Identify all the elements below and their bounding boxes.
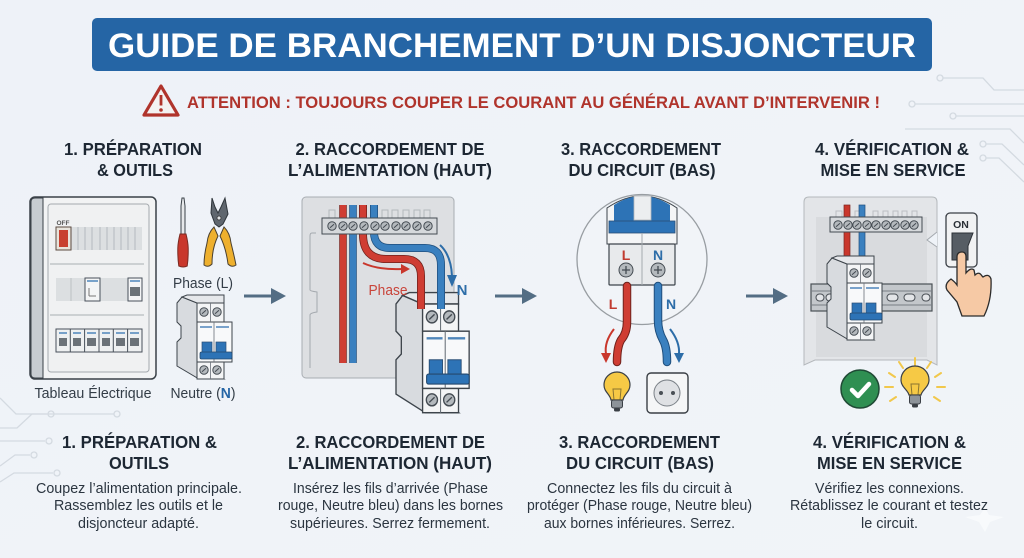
title banner: GUIDE DE BRANCHEMENT D’UN DISJONCTEUR [108, 27, 916, 65]
panel: electrical board: OFF [56, 220, 70, 227]
icon: ON switch [946, 213, 977, 267]
step 4 top heading [815, 138, 969, 180]
wires: feed [343, 205, 353, 363]
wires [617, 286, 667, 362]
description: Rétablissez le courant et testez [790, 498, 988, 514]
step 3 top heading: 3. RACCORDEMENT [561, 139, 721, 159]
breaker close-up: L [622, 247, 631, 263]
heading: DU CIRCUIT (BAS) [566, 453, 714, 473]
terminal block [830, 217, 922, 232]
wires [844, 205, 865, 263]
heading: L’ALIMENTATION (HAUT) [288, 453, 492, 473]
arrow 3 [746, 288, 788, 304]
icon: warning triangle [144, 86, 178, 115]
description: le circuit. [861, 516, 918, 532]
labels L N: L [609, 296, 618, 312]
step 1 top heading: 1. PRÉPARATION [64, 138, 202, 159]
description: aux bornes inférieures. Serrez. [544, 516, 735, 532]
icon: screwdriver [178, 198, 188, 267]
description: protéger (Phase rouge, Neutre bleu) [527, 498, 752, 514]
step 1 top heading: & OUTILS [97, 160, 173, 180]
label: Tableau Électrique: Tableau Électrique [34, 385, 152, 402]
heading: OUTILS [109, 453, 169, 473]
heading: MISE EN SERVICE [817, 453, 962, 473]
heading: 3. RACCORDEMENT [559, 432, 720, 452]
step 4 top heading: MISE EN SERVICE [820, 160, 966, 180]
arrow 1 [244, 288, 286, 304]
label: Neutre (N): Neutre (N) [170, 386, 236, 402]
breaker large [396, 293, 469, 413]
label: Phase: Phase [368, 282, 408, 299]
labels L N: N [666, 296, 676, 312]
description: Insérez les fils d’arrivée (Phase [293, 481, 488, 497]
heading [288, 432, 492, 473]
arrow: neutral [440, 245, 457, 287]
step 2 top heading: 2. RACCORDEMENT DE [296, 139, 484, 159]
heading: 1. PRÉPARATION & [62, 431, 217, 452]
description [36, 481, 242, 532]
breaker [827, 256, 882, 340]
arrow: phase [363, 263, 410, 274]
step 1 bottom text [36, 431, 242, 532]
icon: hand [946, 252, 991, 316]
label: N: N [457, 282, 467, 299]
arrow 2 [495, 288, 537, 304]
icon: pliers [204, 198, 236, 266]
description: Coupez l’alimentation principale. [36, 481, 242, 497]
panel: connection bottom [577, 194, 707, 413]
description: supérieures. Serrez fermement. [290, 516, 490, 532]
heading: 2. RACCORDEMENT DE [296, 432, 485, 452]
labels L N [609, 296, 676, 312]
icon: breaker [177, 295, 232, 379]
title banner [92, 18, 932, 71]
heading [62, 431, 217, 473]
step 2 top heading [288, 139, 492, 180]
arrow: neutral down [670, 329, 684, 363]
icon: green check [841, 370, 879, 408]
description: Vérifiez les connexions. [815, 481, 964, 497]
icon: bulb [604, 372, 630, 412]
step 3 top heading: DU CIRCUIT (BAS) [568, 160, 716, 180]
step 1 top heading [64, 138, 202, 180]
label: Phase (L): Phase (L) [173, 276, 233, 292]
panel: verification [804, 197, 937, 365]
step 2 bottom text [278, 432, 503, 532]
heading: 4. VÉRIFICATION & [813, 431, 966, 452]
icon: lit bulb [885, 358, 945, 408]
description: disjoncteur adapté. [78, 516, 199, 532]
description: Connectez les fils du circuit à [547, 481, 733, 497]
description [278, 481, 503, 532]
panel: electrical board [30, 197, 156, 379]
heading [559, 432, 720, 473]
description [527, 481, 752, 532]
icon: ON switch: ON [953, 219, 969, 231]
heading [813, 431, 966, 473]
breaker close-up: N [653, 247, 663, 263]
warning text: ATTENTION : TOUJOURS COUPER LE COURANT AU GÉNÉRAL AVANT D’INTERVENIR ! [187, 93, 880, 112]
description: rouge, Neutre bleu) dans les bornes [278, 498, 503, 514]
terminal block [322, 218, 437, 234]
step 3 top heading [561, 139, 721, 180]
magnifier circle [577, 194, 707, 324]
step 4 top heading: 4. VÉRIFICATION & [815, 138, 969, 159]
warning banner [144, 86, 880, 115]
wires: phase and neutral to breaker [363, 205, 441, 309]
DIN rail [811, 284, 932, 311]
step 3 bottom text [527, 432, 752, 532]
description [790, 481, 988, 532]
step 4 bottom text [790, 431, 988, 532]
breaker close-up [607, 196, 677, 285]
step 2 top heading: L’ALIMENTATION (HAUT) [288, 160, 492, 180]
description: Rassemblez les outils et le [54, 498, 223, 514]
icon: socket [647, 373, 688, 413]
panel: connection top [302, 197, 454, 378]
arrow: phase down [601, 329, 614, 363]
